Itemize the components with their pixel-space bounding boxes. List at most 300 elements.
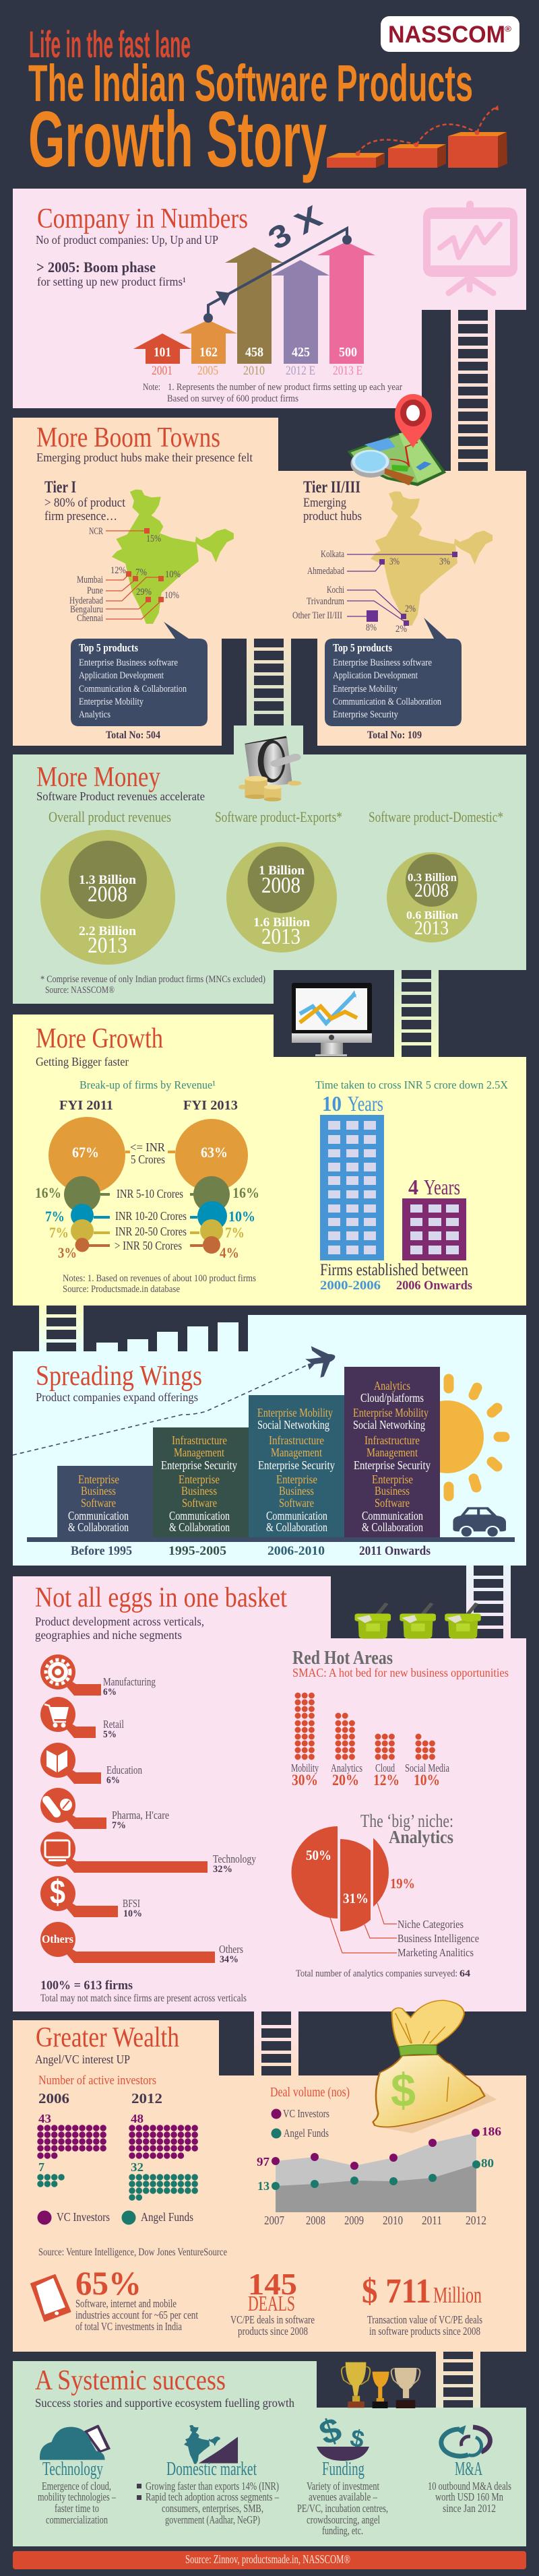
bar: 2006-2010: Enterprise Mobility	[257, 1406, 333, 1419]
chart: deal volume: 2008	[306, 2214, 325, 2227]
chart: analytics split pie	[291, 1826, 479, 1959]
stat: $711 million: $ 711	[362, 2272, 431, 2311]
note	[143, 382, 402, 404]
bar: 2006-2010	[249, 1395, 344, 1537]
subheading: Angel/VC interest UP	[35, 2053, 130, 2066]
chart: SMAC dots: Social Media	[405, 1762, 449, 1774]
source: Source: Venture Intelligence, Dow Jones VentureSource	[38, 2247, 227, 2258]
callout: top 5 products tier II/III: Application Development	[333, 670, 418, 681]
column heads: Overall product revenues	[49, 808, 171, 825]
chart: deal volume: 2009	[344, 2214, 364, 2227]
heading: red hot areas: SMAC: A hot bed for new business opportunities	[292, 1666, 509, 1679]
period labels: 1995-2005	[168, 1544, 226, 1558]
building: 10 years: 10	[322, 1091, 342, 1116]
total: 100% = 613 firms	[40, 1978, 133, 1993]
bar: 2011 onwards: Cloud/platforms	[360, 1391, 424, 1405]
chart: arrows: 458	[245, 345, 263, 360]
building: 10 years	[320, 1091, 384, 1260]
map: tier II/III: Kochi	[327, 585, 344, 595]
chart: revenue bubbles: 7%	[45, 1208, 65, 1225]
bar: BFSI	[40, 1873, 142, 1919]
chart: revenue bubbles: 67%	[72, 1144, 99, 1161]
map: tier I: 12%	[110, 565, 126, 576]
column heads: Software product-Domestic*	[369, 808, 503, 825]
total: tier I: Total No: 504	[106, 730, 160, 741]
bar: 2006-2010: & Collaboration	[266, 1520, 327, 1534]
text: firms established: Firms established between	[320, 1261, 468, 1279]
icon: dollars in bowl: $	[315, 2410, 346, 2452]
chart: SMAC dots: 20%	[332, 1772, 359, 1789]
bar: technology	[40, 1832, 256, 1875]
map: tier II/III: Other Tier II/III	[292, 610, 342, 621]
stat: 145 deals: 145	[248, 2267, 297, 2301]
icon: dollars in bowl	[315, 2410, 369, 2461]
column: domestic market: Rapid tech adoption across segments –	[146, 2490, 279, 2503]
ladder	[394, 970, 439, 1057]
map: tier I: NCR	[89, 526, 103, 537]
heading: Greater Wealth	[36, 2022, 179, 2053]
logo: NASSCOM: NASSCOM	[388, 22, 505, 48]
chart: revenue bubbles: 7%	[225, 1224, 245, 1241]
icon: sun	[411, 1379, 505, 1496]
subheading: Product companies expand offerings	[36, 1390, 198, 1404]
text: tier II/III: Emerging	[303, 496, 346, 510]
icon: presentation board	[423, 201, 517, 293]
bar: 2011 onwards: Enterprise Mobility	[353, 1406, 429, 1419]
chart: deal volume: Angel Funds	[284, 2127, 329, 2139]
text: tier II/III	[303, 478, 362, 523]
icon: rising boxes	[327, 105, 507, 168]
column: domestic market: Domestic market	[166, 2458, 257, 2480]
chart: overall revenues: 2008	[88, 882, 127, 907]
ladder	[254, 2011, 298, 2075]
callout: top 5 products tier II/III: Communication & Collaboration	[333, 697, 441, 707]
column: funding: funding, etc.	[322, 2524, 363, 2537]
heading: Company in Numbers	[37, 203, 248, 234]
chart: revenue bubbles: 16%	[35, 1184, 61, 1201]
panel: more money	[13, 726, 526, 1004]
bar: 2006-2010: Infrastructure	[269, 1434, 324, 1447]
logo: NASSCOM	[381, 16, 519, 52]
chart: deal volume: VC Investors	[283, 2107, 329, 2120]
bar: before 1995: Enterprise	[78, 1473, 119, 1486]
subheading: Software Product revenues accelerate	[36, 790, 205, 803]
heading: big niche	[360, 1811, 453, 1847]
column: M&A: 10 outbound M&A deals	[428, 2480, 511, 2492]
chart: deal volume: Deal volume (nos)	[270, 2085, 350, 2100]
heading: Spreading Wings	[36, 1361, 202, 1392]
chart heading: time taken: Time taken to cross INR 5 crore down 2.5X	[315, 1078, 508, 1091]
title line 2: Growth Story	[28, 95, 327, 183]
bar: 1995-2005: Infrastructure	[172, 1434, 227, 1447]
icon: dollars in bowl: $	[348, 2424, 367, 2453]
bar: 2006-2010: Enterprise	[276, 1473, 317, 1486]
building: 10 years: Years	[348, 1091, 383, 1116]
stat: 65%	[31, 2264, 198, 2333]
period labels	[71, 1544, 431, 1558]
text: boom phase: > 2005: Boom phase	[36, 259, 156, 276]
chart: domestic: 0.6 Billion	[406, 909, 459, 922]
chart: analytics split pie: 50%	[306, 1847, 331, 1863]
footer source bar	[13, 2551, 526, 2569]
map: tier I: 15%	[146, 534, 161, 544]
icon: phone	[31, 2275, 71, 2321]
column: technology: commercialization	[46, 2513, 108, 2526]
chart: deal volume: 80	[481, 2156, 494, 2170]
chart: deal volume: 13	[257, 2179, 270, 2193]
header	[28, 16, 519, 183]
bar: technology: Technology	[213, 1853, 256, 1865]
subheading: Success stories and supportive ecosystem fuelling growth	[35, 2396, 294, 2410]
column: funding: avenues available –	[309, 2490, 377, 2503]
chart: revenue bubbles: <= INR	[130, 1140, 165, 1154]
notes: Notes: 1. Based on revenues of about 100 product firms	[63, 1273, 256, 1284]
note: Note:	[143, 382, 160, 393]
stat: $711 million: in software products since 2008	[369, 2325, 480, 2338]
bar: 2006-2010: Enterprise Security	[258, 1458, 335, 1472]
bar: pharma: Pharma, H'care	[112, 1809, 169, 1822]
chart: active investors: 32	[131, 2160, 144, 2174]
chart: analytics split pie: Business Intelligence	[398, 1932, 479, 1945]
chart: analytics split pie: Marketing Analitics	[398, 1946, 474, 1959]
stat: 145 deals: DEALS	[248, 2291, 295, 2315]
chart: domestic: 2013	[414, 917, 449, 939]
subheading	[35, 1615, 204, 1642]
subheading: Getting Bigger faster	[36, 1055, 129, 1068]
chart: arrows: 500	[339, 345, 357, 360]
icon: dollar: $	[50, 1873, 65, 1911]
icon: money bag	[373, 2000, 497, 2133]
bar: 2011 onwards	[344, 1367, 440, 1537]
baseline bar	[27, 1537, 515, 1542]
bar: manufacturing: 6%	[103, 1687, 117, 1698]
chart: exports: 2008	[261, 873, 300, 898]
chart: active investors: 2012	[131, 2090, 162, 2106]
chart: arrows: 2012 E	[286, 364, 315, 378]
bar: education: Education	[106, 1764, 142, 1776]
callout: top 5 products tier II/III: Enterprise Security	[333, 709, 398, 720]
map: tier I: Chennai	[77, 613, 103, 624]
panel: spreading wings	[13, 1306, 526, 1566]
bar: 2011 onwards: Analytics	[374, 1379, 410, 1392]
text: tier II/III: Tier II/III	[303, 478, 360, 496]
heading: big niche: The ‘big’ niche:	[360, 1811, 453, 1831]
chart: SMAC dots: 12%	[373, 1772, 400, 1789]
survey note: 64	[459, 1968, 471, 1979]
chart: revenue bubbles: 10%	[228, 1208, 255, 1225]
chart: arrows: 2010	[243, 364, 265, 378]
map: tier I	[69, 490, 234, 624]
chart: arrows: 162	[199, 345, 218, 360]
subheading: geographies and niche segments	[35, 1628, 182, 1642]
ladder	[247, 639, 291, 726]
panel: more growth	[13, 970, 526, 1306]
bar: BFSI: 10%	[123, 1908, 142, 1919]
bar: 2011 onwards: Management	[367, 1446, 418, 1459]
map: tier II/III: 2%	[405, 604, 416, 614]
chart: overall revenues: 1.3 Billion	[79, 873, 136, 887]
chart: revenue bubbles: 63%	[201, 1144, 228, 1161]
panel: greater wealth	[13, 2000, 526, 2352]
bar: others	[40, 1922, 243, 1965]
notes	[63, 1273, 256, 1295]
total: Total may not match since firms are present across verticals	[40, 1993, 247, 2004]
text: firms established: 2000-2006	[320, 1279, 381, 1293]
heading: red hot areas	[292, 1648, 509, 1679]
map: tier II/III: Kolkata	[321, 549, 344, 560]
bar: 2006-2010: Management	[271, 1446, 322, 1459]
bar: before 1995: Business	[81, 1484, 116, 1498]
chart: active investors: 2006	[38, 2090, 69, 2106]
bar: others: Others	[42, 1933, 73, 1945]
stat: 145 deals: VC/PE deals in software	[230, 2313, 315, 2326]
survey note: Total number of analytics companies surveyed:	[296, 1968, 457, 1979]
chart: revenue bubbles: 5 Crores	[131, 1153, 165, 1166]
chart: exports: 1.6 Billion	[253, 915, 310, 930]
stat: 145 deals	[230, 2267, 315, 2338]
heading: big niche: Analytics	[389, 1827, 453, 1847]
stat: 145 deals: products since 2008	[238, 2325, 308, 2338]
heading: A Systemic success	[35, 2365, 226, 2396]
chart: analytics split pie: 19%	[390, 1875, 415, 1892]
subheading: Product development across verticals,	[35, 1615, 204, 1628]
callout: top 5 products tier II/III: Enterprise Mobility	[333, 684, 398, 695]
chart: revenue bubbles: FYI 2013	[183, 1098, 238, 1113]
text: boom phase: for setting up new product firms¹	[37, 275, 186, 288]
stat: 65%: Software, internet and mobile	[75, 2297, 177, 2310]
chart: domestic: 2008	[414, 879, 449, 901]
bar: 1995-2005: Business	[181, 1484, 217, 1498]
chart: active investors: 43	[38, 2112, 51, 2125]
period labels: 2006-2010	[267, 1544, 325, 1558]
building: 4 years	[402, 1175, 466, 1260]
bar: 1995-2005	[153, 1427, 249, 1537]
heading: Not all eggs in one basket	[35, 1582, 287, 1613]
chart: SMAC dots	[291, 1696, 449, 1789]
icon: map with magnifier and pin	[347, 429, 446, 486]
chart heading: break-up: Break-up of firms by Revenue¹	[80, 1078, 216, 1091]
chart: exports	[226, 842, 337, 953]
panel: more boom towns	[13, 394, 526, 746]
icon: book	[46, 1750, 67, 1772]
bar: 1995-2005: Enterprise Security	[161, 1458, 237, 1472]
column: technology: faster time to	[55, 2502, 99, 2515]
ladder	[451, 310, 495, 471]
chart: domestic	[387, 852, 477, 942]
chart: revenue bubbles: 3%	[58, 1244, 77, 1261]
bar: 2006-2010: Communication	[266, 1509, 327, 1522]
chart: deal volume: 2012	[466, 2214, 486, 2227]
footnote: * Comprise revenue of only Indian product firms (MNCs excluded)	[40, 974, 265, 985]
panel: company in numbers	[13, 189, 526, 471]
map: tier I: Bengaluru	[70, 604, 103, 615]
column: domestic market: government (Aadhar, NeGP)	[165, 2513, 260, 2526]
icon: safe and coins	[239, 736, 301, 802]
chart: arrows: 101	[154, 345, 171, 360]
chart: active investors: VC Investors	[57, 2210, 110, 2224]
chart: arrows: 2013 E	[333, 364, 362, 378]
callout: top 5 products tier II/III: Top 5 products	[333, 641, 392, 654]
chart: SMAC dots: Mobility	[291, 1762, 319, 1774]
column: technology: Emergence of cloud,	[42, 2480, 111, 2492]
chart: overall revenues: 2.2 Billion	[79, 924, 136, 938]
callout: top 5 products tier I: Enterprise Mobility	[79, 697, 144, 707]
chart: active investors: 7	[38, 2160, 44, 2174]
map: tier II/III: 2%	[395, 624, 407, 635]
bar: manufacturing: Manufacturing	[103, 1675, 156, 1688]
column: M&A: M&A	[455, 2458, 482, 2480]
bar: 2006-2010: Business	[279, 1484, 314, 1498]
bar: 2011 onwards: Social Networking	[353, 1418, 425, 1431]
flight path	[13, 1365, 308, 1455]
chart: overall revenues: 2013	[88, 933, 127, 958]
chart: active investors	[38, 2073, 196, 2224]
bar: 2011 onwards: Software	[375, 1496, 410, 1510]
bar: 1995-2005: Enterprise	[179, 1473, 220, 1486]
text: tier I: firm presence…	[44, 509, 117, 523]
map: tier I: 29%	[136, 587, 152, 598]
footnote: Source: NASSCOM®	[45, 985, 115, 996]
icon: money bag: $	[391, 2064, 416, 2117]
bar: others: 34%	[220, 1954, 239, 1965]
chart: revenue bubbles: > INR 50 Crores	[115, 1239, 182, 1252]
chart: revenue bubbles: 7%	[49, 1224, 69, 1241]
logo: NASSCOM: ®	[505, 24, 511, 34]
column: technology: mobility technologies –	[38, 2490, 116, 2503]
chart: deal volume	[257, 2085, 501, 2227]
chart: deal volume: 97	[257, 2155, 270, 2168]
stat: 65%: 65%	[75, 2264, 141, 2302]
subheading: No of product companies: Up, Up and UP	[36, 233, 218, 247]
map: tier II/III: 3%	[389, 556, 400, 567]
icon: monitor	[45, 1840, 69, 1861]
chart: revenue bubbles: 16%	[232, 1184, 259, 1201]
panel: not all eggs in one basket	[13, 1566, 526, 2011]
bar: before 1995: Software	[81, 1496, 116, 1510]
chart: analytics split pie: Niche Categories	[398, 1918, 464, 1931]
map: tier I: 10%	[164, 590, 179, 601]
bar: 1995-2005: Software	[182, 1496, 217, 1510]
chart: SMAC dots: 30%	[292, 1772, 318, 1789]
icon: map pin	[395, 394, 432, 448]
chart: revenue bubbles: INR 20-50 Crores	[115, 1225, 187, 1238]
ladder	[436, 2352, 480, 2408]
stat: 65%: industries account for ~65 per cent	[75, 2309, 198, 2321]
bar: retail	[40, 1697, 124, 1740]
chart: deal volume: 186	[482, 2125, 501, 2138]
bar: education: 6%	[106, 1775, 120, 1786]
text: firms established: 2006 Onwards	[396, 1279, 472, 1293]
heading: More Boom Towns	[36, 422, 220, 453]
chart: revenue bubbles: INR 5-10 Crores	[117, 1187, 183, 1200]
map: tier II/III: Trivandrum	[307, 596, 344, 607]
column: funding: crowdsourcing, angel	[307, 2513, 380, 2526]
bar: 2011 onwards: Business	[375, 1484, 410, 1498]
callout: top 5 products tier I	[71, 622, 208, 726]
chart: revenue bubbles: FYI 2011	[59, 1098, 113, 1113]
bar: 2011 onwards: Enterprise Security	[354, 1458, 431, 1472]
note: 1. Represents the number of new product firms setting up each year	[168, 382, 402, 393]
bar: 2006-2010: Software	[279, 1496, 314, 1510]
bar: 2011 onwards: & Collaboration	[362, 1520, 423, 1534]
heading: red hot areas: Red Hot Areas	[292, 1648, 393, 1669]
panel: a systemic success	[13, 2352, 526, 2546]
column heads	[49, 808, 503, 825]
chart: SMAC dots: 10%	[414, 1772, 440, 1789]
bar: manufacturing	[40, 1654, 156, 1698]
chart: active investors: Angel Funds	[141, 2210, 193, 2224]
icon: trophies	[342, 2362, 420, 2408]
icon: circular arrows	[441, 2426, 490, 2456]
chart: overall revenues	[40, 830, 175, 965]
stat: $711 million: Million	[433, 2283, 482, 2308]
bar: pharma: 7%	[112, 1820, 126, 1831]
bar: retail: 5%	[103, 1729, 117, 1740]
map: tier I: Mumbai	[77, 575, 103, 585]
chart: revenue bubbles: 4%	[220, 1244, 239, 1261]
footnote	[40, 974, 265, 996]
column: technology	[38, 2426, 116, 2526]
map: tier II/III	[292, 491, 493, 635]
text: tier I: > 80% of product	[44, 496, 126, 510]
text: boom phase	[36, 259, 186, 288]
subheading: Emerging product hubs make their presence felt	[36, 451, 253, 464]
column: M&A	[428, 2426, 511, 2515]
text: tier I: Tier I	[44, 478, 76, 496]
bar: technology: 32%	[213, 1864, 232, 1875]
chart: arrows: 425	[292, 345, 310, 360]
text: tier II/III: product hubs	[303, 509, 362, 523]
column: M&A: since Jan 2012	[443, 2502, 496, 2515]
ladder	[466, 1566, 511, 1638]
ladder	[39, 1306, 84, 1351]
bar: before 1995: Communication	[68, 1509, 129, 1522]
callout: top 5 products tier I: Enterprise Business software	[79, 657, 178, 668]
trend arrow: 3X	[203, 198, 352, 323]
stat: 65%: of total VC investments in India	[75, 2320, 182, 2333]
callout: top 5 products tier II/III: Enterprise Business software	[333, 657, 432, 668]
column heads: Software product-Exports*	[215, 808, 342, 825]
bar: 1995-2005: & Collaboration	[169, 1520, 230, 1534]
icon: baskets	[355, 1603, 481, 1639]
map: tier I: Pune	[87, 585, 103, 596]
period labels: Before 1995	[71, 1544, 132, 1558]
callout: top 5 products tier I: Analytics	[79, 709, 110, 720]
bar: pharma	[40, 1788, 169, 1831]
column: funding	[297, 2410, 388, 2537]
total: tier II/III: Total No: 109	[367, 730, 422, 741]
bar: 2006-2010: Social Networking	[257, 1418, 329, 1431]
map: tier I: 10%	[165, 569, 181, 580]
chart: arrows: 2005	[197, 364, 218, 378]
notes: Source: Productsmade.in database	[63, 1284, 180, 1295]
building: 4 years: 4	[408, 1175, 418, 1199]
bar: before 1995: & Collaboration	[68, 1520, 129, 1534]
note: Based on survey of 600 product firms	[167, 393, 298, 404]
chart: deal volume: 2011	[422, 2214, 442, 2227]
bar: education	[40, 1743, 142, 1786]
total	[40, 1978, 247, 2004]
chart: revenue bubbles	[35, 1098, 259, 1261]
icon: pills	[46, 1799, 72, 1813]
chart: active investors: Number of active investors	[38, 2073, 156, 2088]
icon: plane	[305, 1346, 335, 1378]
bar: 2011 onwards: Communication	[362, 1509, 423, 1522]
building: 4 years: Years	[424, 1175, 460, 1199]
chart: SMAC dots: Analytics	[331, 1762, 362, 1774]
period labels: 2011 Onwards	[359, 1544, 431, 1558]
bar: 1995-2005: Management	[174, 1446, 224, 1459]
